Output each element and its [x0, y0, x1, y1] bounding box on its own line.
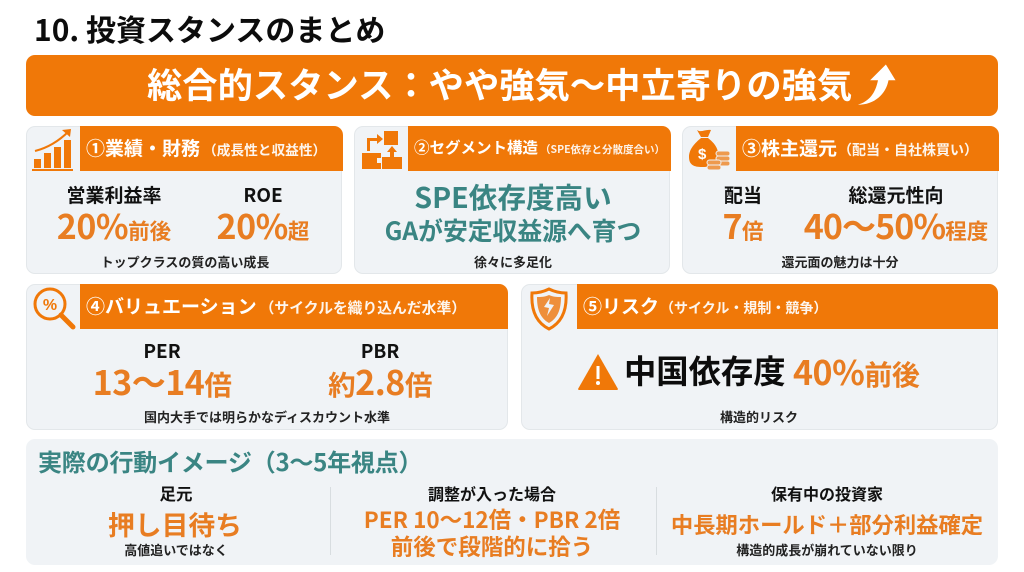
- panel header: ②セグメント構造（SPE依存と分散度合い）: [414, 136, 665, 158]
- panel: valuation: [26, 284, 508, 430]
- column note: 構造的成長が崩れていない限り: [736, 540, 918, 559]
- risk message: 中国依存度: [624, 347, 786, 393]
- column label: 調整が入った場合: [428, 481, 556, 505]
- title: 10. 投資スタンスのまとめ: [34, 6, 385, 50]
- panel: segment structure: [354, 126, 670, 274]
- metric value: 20%前後: [57, 200, 171, 249]
- icon: warning triangle: [578, 354, 618, 390]
- icon: shield: [530, 287, 568, 331]
- metric label: PBR: [361, 337, 399, 364]
- metric label: 配当: [724, 181, 762, 208]
- panel header: [577, 284, 998, 329]
- column action: 押し目待ち: [108, 504, 242, 543]
- column label: 保有中の投資家: [771, 481, 883, 505]
- key message line 1: SPE依存度高い: [414, 176, 612, 217]
- column action: PER 10～12倍・PBR 2倍: [364, 503, 620, 535]
- banner text: 総合的スタンス：やや強気～中立寄りの強気: [147, 58, 852, 109]
- panel: action image: [26, 439, 998, 565]
- note: トップクラスの質の高い成長: [101, 252, 269, 271]
- panel header: ④バリュエーション（サイクルを織り込んだ水準）: [86, 292, 466, 319]
- column action: 前後で段階的に拾う: [391, 530, 593, 562]
- metric value: 13～14倍: [93, 356, 231, 405]
- column action: [364, 503, 620, 562]
- panel: risk: [521, 284, 998, 430]
- metric label: PER: [143, 337, 181, 364]
- metric label: 営業利益率: [66, 181, 162, 208]
- metric value: 20%超: [217, 200, 309, 249]
- column note: 高値追いではなく: [124, 540, 228, 559]
- panel header: ①業績・財務（成長性と収益性）: [86, 134, 326, 161]
- icon: puzzle blocks: [362, 131, 402, 169]
- note: 徐々に多足化: [474, 252, 552, 271]
- metric value: 7倍: [722, 200, 764, 249]
- risk value: 40%前後: [793, 346, 919, 395]
- panel header: [736, 126, 999, 171]
- panel header: ⑤リスク（サイクル・規制・競争）: [583, 292, 827, 319]
- column label: 足元: [160, 481, 192, 505]
- panel header: [80, 126, 343, 171]
- icon: money bag and coins: $: [698, 146, 707, 163]
- divider: [656, 487, 657, 555]
- note: 構造的リスク: [720, 407, 798, 426]
- panel header: [80, 284, 508, 329]
- panel header: [408, 126, 671, 171]
- metric label: 総還元性向: [848, 181, 944, 208]
- note: 還元面の魅力は十分: [781, 252, 899, 271]
- key message line 2: GAが安定収益源へ育つ: [385, 212, 641, 248]
- icon: magnifier with percent: %: [43, 297, 57, 314]
- icon: growth chart: [32, 129, 73, 171]
- panel heading: 実際の行動イメージ（3～5年視点）: [38, 443, 422, 478]
- metric label: ROE: [243, 181, 283, 208]
- overall stance banner: [26, 55, 998, 116]
- panel: performance and finance: [26, 126, 342, 274]
- metric value: 約2.8倍: [328, 356, 432, 405]
- metric value: 40～50%程度: [804, 200, 988, 249]
- panel header: ③株主還元（配当・自社株買い）: [742, 134, 978, 161]
- note: 国内大手では明らかなディスカウント水準: [144, 407, 390, 426]
- icon: magnifier with percent: [34, 288, 76, 330]
- icon: money bag and coins: [689, 130, 730, 170]
- panel: shareholder returns: [682, 126, 998, 274]
- column action: 中長期ホールド＋部分利益確定: [671, 508, 983, 540]
- icon: up arrow: [858, 64, 896, 105]
- divider: [330, 487, 331, 555]
